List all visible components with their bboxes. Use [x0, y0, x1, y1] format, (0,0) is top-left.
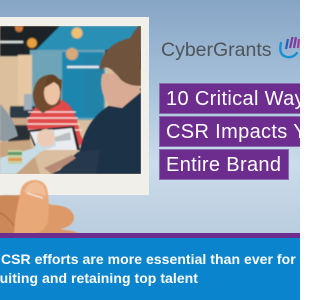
- footer text: CSR efforts are more essential than ever for: [1, 251, 296, 267]
- footer text: [0, 251, 296, 286]
- logo: CyberGrants: [161, 37, 300, 61]
- man in foreground: [78, 88, 141, 174]
- title line 1: [159, 83, 300, 114]
- logo icon: hand: [279, 37, 300, 58]
- logo wordmark: CyberGrants: [161, 39, 272, 61]
- office photo: [0, 24, 141, 174]
- title line 3: Entire Brand: [166, 154, 281, 176]
- woman at left: [0, 104, 18, 142]
- laptop: [28, 126, 80, 150]
- background gradient: [0, 0, 300, 234]
- polaroid card: [0, 17, 149, 195]
- blue footer panel: [0, 238, 300, 300]
- seated woman in striped top: [27, 100, 84, 150]
- hands and foreground sleeves: [0, 129, 56, 174]
- hand holding card: [0, 180, 82, 234]
- title line 3: [159, 149, 289, 180]
- title line 2: [159, 116, 300, 147]
- purple band: [0, 233, 300, 238]
- photo card held by hand: [0, 17, 149, 233]
